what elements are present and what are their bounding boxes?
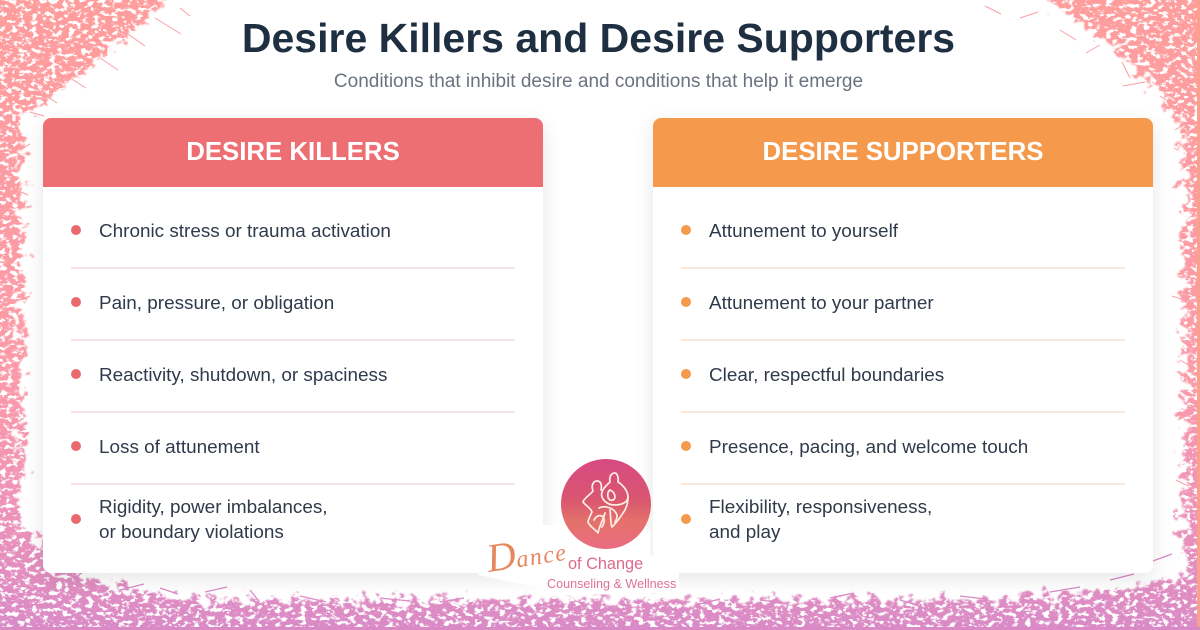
item: rigidity: Rigidity, power imbalances,	[99, 497, 328, 518]
logo: dance of change	[478, 459, 679, 596]
item: presence: Presence, pacing, and welcome touch	[709, 437, 1028, 458]
item: pain: Pain, pressure, or obligation	[99, 293, 334, 314]
heading: desire killers: DESIRE KILLERS	[186, 138, 400, 166]
heading: desire supporters: DESIRE SUPPORTERS	[763, 138, 1043, 166]
title: Desire Killers and Desire Supporters	[242, 15, 955, 61]
logo wordmark	[482, 524, 676, 591]
item: presence	[681, 411, 1125, 458]
item: rigidity	[71, 483, 515, 543]
subtitle: Conditions that inhibit desire and conditions that help it emerge	[334, 71, 863, 92]
item: loss of attunement	[71, 411, 515, 458]
item: boundaries	[681, 339, 1125, 386]
item: flexibility	[681, 483, 1125, 543]
item: flexibility: Flexibility, responsiveness,	[709, 497, 932, 518]
item: attunement to partner: Attunement to your partner	[709, 293, 934, 314]
panel: desire supporters	[653, 118, 1153, 573]
heading: desire supporters	[653, 118, 1153, 187]
item: flexibility: and play	[709, 522, 780, 543]
item: rigidity: or boundary violations	[99, 522, 284, 543]
panel: desire killers	[43, 118, 543, 573]
item: pain	[71, 267, 515, 314]
item: boundaries: Clear, respectful boundaries	[709, 365, 944, 386]
item: reactivity	[71, 339, 515, 386]
twigs along the border	[8, 6, 1190, 486]
item: loss of attunement: Loss of attunement	[99, 437, 260, 458]
logo wordmark: of Change	[568, 555, 643, 573]
item: attunement to partner	[681, 267, 1125, 314]
heading: desire killers	[43, 118, 543, 187]
logo wordmark: Counseling & Wellness	[547, 577, 676, 591]
logo wordmark: Dance	[482, 524, 570, 581]
item: chronic stress: Chronic stress or trauma activation	[99, 221, 391, 242]
item: reactivity: Reactivity, shutdown, or spaciness	[99, 365, 387, 386]
item: attunement to yourself: Attunement to yourself	[709, 221, 898, 242]
